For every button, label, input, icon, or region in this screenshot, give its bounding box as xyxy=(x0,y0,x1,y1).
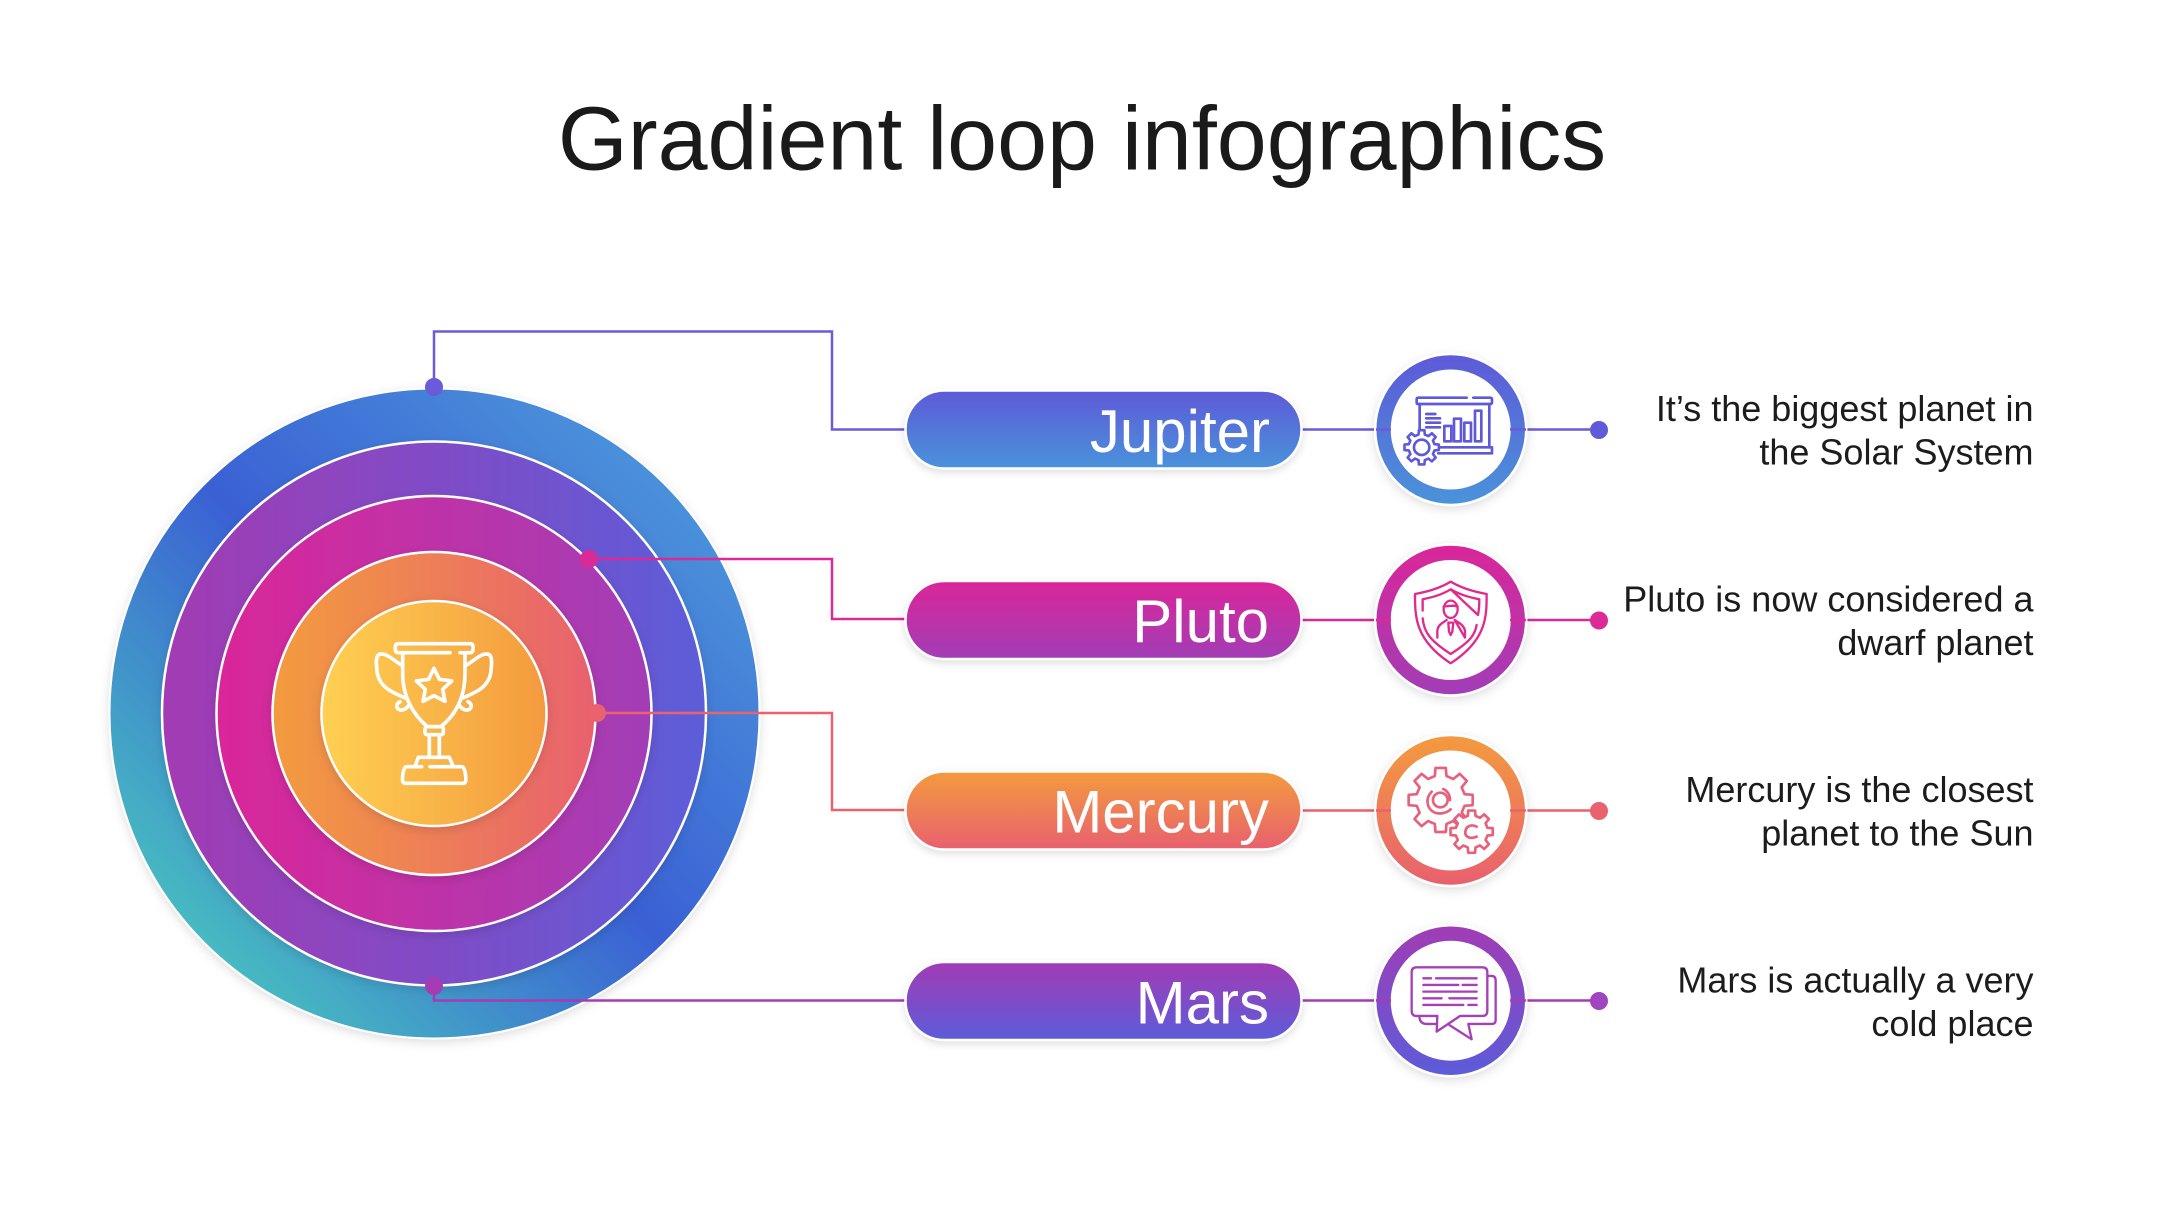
icon: gears xyxy=(1409,768,1493,853)
description: Mercury: Mercury is the closest xyxy=(1685,769,2034,810)
description: Pluto xyxy=(1623,578,2034,663)
end dot: Pluto xyxy=(1590,612,1608,630)
description: Jupiter: It’s the biggest planet in xyxy=(1656,388,2034,429)
connector: Mercury xyxy=(588,704,906,810)
row: Mercury xyxy=(906,735,2034,886)
description: Jupiter xyxy=(1656,388,2034,472)
description: Pluto: dwarf planet xyxy=(1837,622,2034,663)
connector: Pluto xyxy=(580,550,906,619)
label pill: Mercury xyxy=(906,772,1302,850)
description: Mercury: planet to the Sun xyxy=(1761,812,2034,854)
icon ring: Mars xyxy=(1375,925,1526,1076)
row: Pluto xyxy=(906,544,2034,696)
label pill: Mercury: Mercury xyxy=(1052,778,1269,846)
description: Jupiter: the Solar System xyxy=(1759,432,2034,472)
label pill: Pluto xyxy=(906,581,1302,659)
label pill: Jupiter xyxy=(906,390,1302,468)
description: Mars: cold place xyxy=(1871,1003,2034,1044)
row: Jupiter xyxy=(906,354,2034,505)
icon ring: Mercury xyxy=(1375,735,1526,886)
icon ring: Pluto xyxy=(1375,544,1526,696)
pill connector and right connector: Mars xyxy=(1301,999,1599,1002)
description: Mars: Mars is actually a very xyxy=(1677,960,2034,1000)
label pill: Mars: Mars xyxy=(1136,970,1269,1036)
description: Mercury xyxy=(1685,769,2034,854)
icon: chat bubbles xyxy=(1412,967,1496,1039)
row: Mars xyxy=(906,925,2034,1076)
description: Mars xyxy=(1677,960,2034,1044)
pill connector and right connector: Jupiter xyxy=(1301,428,1599,431)
label pill: Mars xyxy=(906,962,1302,1040)
title: Gradient loop infographics xyxy=(558,90,1606,190)
label pill: Jupiter: Jupiter xyxy=(1090,398,1270,465)
icon: shield with person xyxy=(1415,582,1487,663)
icon: trophy xyxy=(376,644,492,783)
icon: presentation board with gear xyxy=(1405,398,1492,464)
connector: Jupiter xyxy=(425,332,906,430)
icon ring: Jupiter xyxy=(1375,354,1526,505)
pill connector and right connector: Pluto xyxy=(1301,619,1599,621)
end dot: Mercury xyxy=(1590,802,1608,820)
connector: Mars xyxy=(425,977,906,1000)
end dot: Mars xyxy=(1590,992,1608,1010)
end dot: Jupiter xyxy=(1590,421,1608,439)
label pill: Pluto: Pluto xyxy=(1132,588,1269,655)
concentric loop circles xyxy=(110,388,760,1038)
pill connector and right connector: Mercury xyxy=(1301,809,1599,812)
description: Pluto: Pluto is now considered a xyxy=(1623,578,2034,620)
